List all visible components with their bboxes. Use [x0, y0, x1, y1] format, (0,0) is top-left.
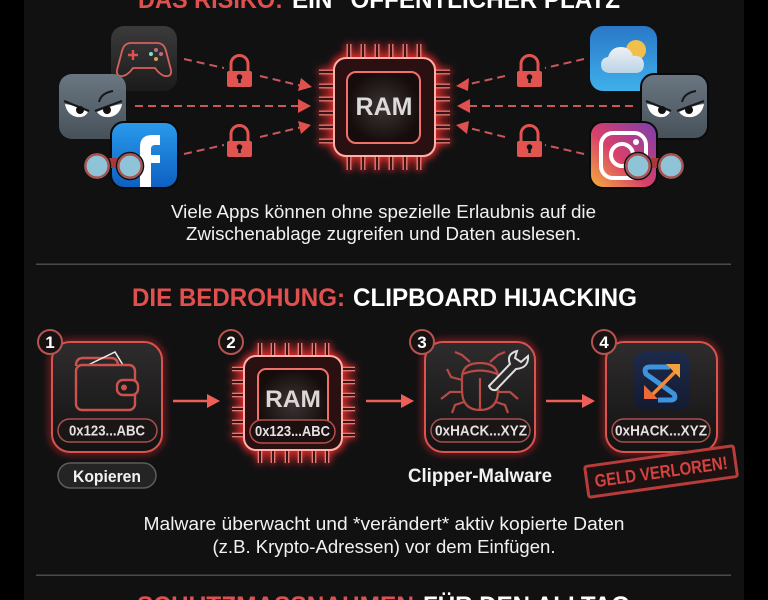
icon: wallet	[76, 352, 138, 410]
icon: game app	[111, 26, 177, 91]
label: address pill: 0x123...ABC	[69, 422, 145, 440]
icon: angry face left	[59, 74, 126, 139]
label: address pill: 0xHACK...XYZ	[615, 422, 707, 440]
badge: 2: 2	[226, 333, 236, 352]
icon: binoculars right	[624, 152, 684, 180]
button: Kopieren	[58, 463, 156, 488]
arrows: apps to RAM	[135, 59, 633, 154]
heading: die bedrohung	[132, 284, 637, 312]
heading: die bedrohung: DIE BEDROHUNG:	[132, 284, 345, 312]
step 3: bug malware	[410, 330, 535, 452]
button: Kopieren: Kopieren	[73, 467, 141, 486]
label: RAM: RAM	[356, 93, 412, 121]
text block: threat description: Malware überwacht und *verändert* aktiv kopierte Daten	[144, 513, 624, 534]
label: Clipper-Malware: Clipper-Malware	[408, 466, 552, 487]
icon: instagram app with binoculars	[590, 122, 684, 188]
badge: 1: 1	[45, 333, 55, 352]
badge: 3: 3	[417, 333, 427, 352]
heading: die bedrohung: CLIPBOARD HIJACKING	[353, 284, 637, 312]
badge: 4: 4	[599, 333, 609, 352]
label: RAM: RAM	[265, 386, 321, 413]
arrow: 3 to 4	[546, 394, 595, 408]
step 1: wallet	[38, 330, 162, 452]
arrow: 2 to 3	[366, 394, 414, 408]
heading: schutzmassnahmen	[137, 591, 630, 600]
label: address pill: 0x123...ABC	[255, 423, 330, 440]
text block: risk description	[171, 201, 596, 244]
icon: facebook app with binoculars	[84, 122, 178, 188]
icon: angry face right	[641, 74, 708, 139]
stamp: Geld verloren: GELD VERLOREN!	[593, 453, 729, 491]
icon: wrench	[489, 351, 528, 390]
icon: bug	[441, 352, 518, 413]
step 4: exchange app	[592, 330, 717, 452]
arrow: 1 to 2	[173, 394, 220, 408]
text block: threat description	[144, 513, 624, 557]
text block: risk description: Zwischenablage zugreifen und Daten auslesen.	[186, 223, 581, 244]
text block: threat description: (z.B. Krypto-Adressen) vor dem Einfügen.	[212, 536, 556, 557]
icon: exchange app	[633, 352, 690, 410]
text block: risk description: Viele Apps können ohne spezielle Erlaubnis auf die	[171, 201, 596, 222]
icon: binoculars left	[84, 152, 144, 180]
label: address pill: 0xHACK...XYZ	[435, 422, 527, 440]
icon: padlocks	[227, 56, 542, 157]
heading: das risiko	[138, 0, 620, 14]
chip: central RAM	[319, 44, 450, 170]
step 2: RAM chip	[219, 330, 355, 463]
icon: weather app	[590, 26, 657, 91]
